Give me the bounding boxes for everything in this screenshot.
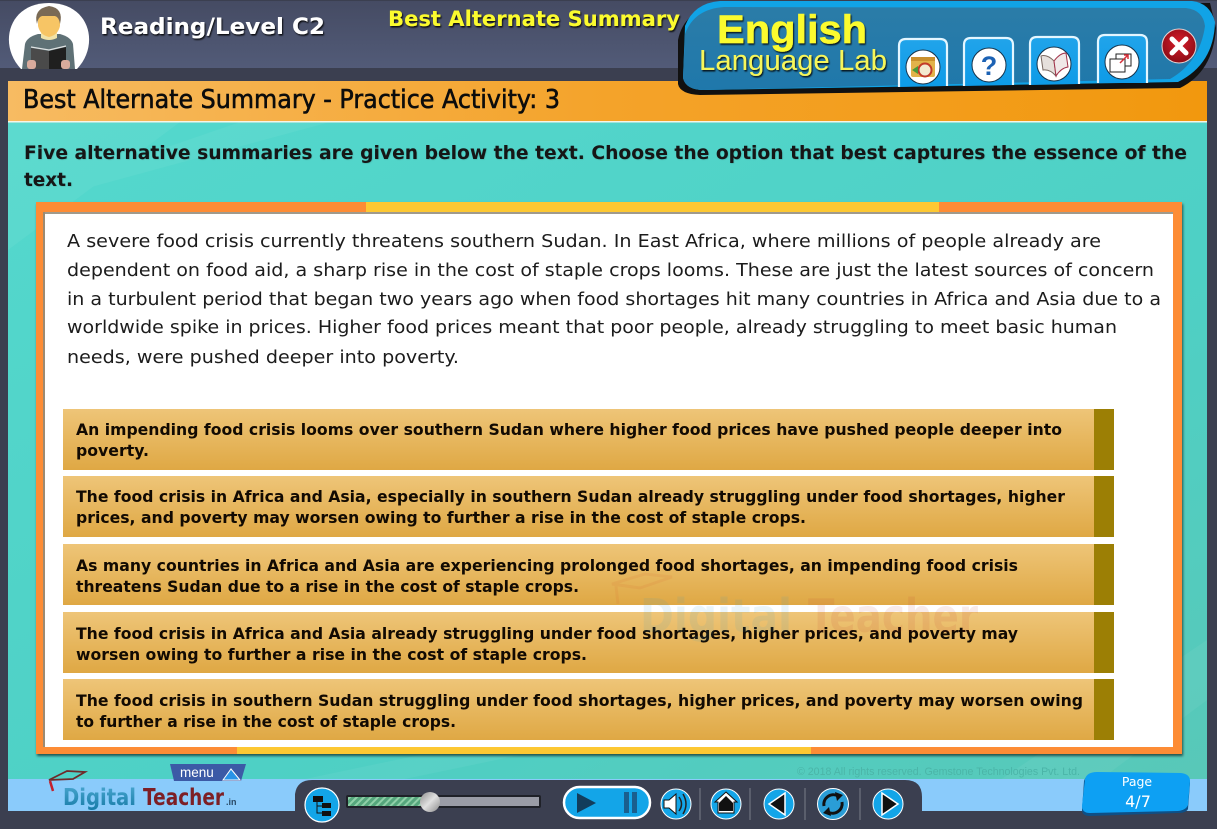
play and pause control xyxy=(564,787,650,818)
logo: Digital Teacher: Digital xyxy=(63,785,136,811)
option 5: to further a rise in the cost of staple crops. xyxy=(76,712,456,731)
passage text: worldwide spike in prices. Higher food prices meant that poor people, already struggling to meet basic human xyxy=(67,317,1117,338)
icon: home xyxy=(711,789,741,819)
option 5: The food crisis in southern Sudan struggling under food shortages, higher prices, and poverty may worsen owing xyxy=(76,691,1083,710)
panel: reading passage and options xyxy=(36,202,1182,754)
icon: book tab xyxy=(1030,37,1079,85)
icon: window tab xyxy=(1098,35,1147,83)
progress slider xyxy=(346,792,541,812)
icon: history folder tab xyxy=(899,39,947,87)
option 1 xyxy=(63,409,1114,470)
option 4 xyxy=(63,612,1114,673)
menu tab xyxy=(170,764,246,781)
passage text: needs, were pushed deeper into poverty. xyxy=(67,347,459,368)
page indicator: Page xyxy=(1122,774,1152,789)
passage text: dependent on food aid, a sharp rise in the cost of staple crops looms. These are just the latest sources of concern xyxy=(67,260,1154,281)
teal content panel xyxy=(8,122,1207,780)
watermark: Digital Teacher: Digital xyxy=(640,589,792,643)
logo: Digital Teacher xyxy=(49,771,236,811)
passage text xyxy=(67,231,1161,368)
instruction text: text. xyxy=(24,169,73,191)
icon: close button xyxy=(1162,29,1196,63)
option 3: threatens Sudan due to a rise in the cost of staple crops. xyxy=(76,577,579,596)
passage text: A severe food crisis currently threatens southern Sudan. In East Africa, where millions of people already are xyxy=(67,231,1101,252)
icon: replay xyxy=(818,788,848,820)
logo text: Language Lab: Language Lab xyxy=(699,45,887,77)
icon: volume xyxy=(661,789,691,819)
icon: help tab: ? xyxy=(981,51,997,81)
option 3: As many countries in Africa and Asia are experiencing prolonged food shortages, an impending food crisis xyxy=(76,556,1018,575)
option 5 xyxy=(63,679,1114,740)
icon: previous xyxy=(764,789,794,819)
logo text: English: English xyxy=(717,8,867,52)
heading: Practice Activity: Best Alternate Summary - Practice Activity: 3 xyxy=(23,85,560,115)
header bar xyxy=(0,1,1217,68)
instruction text xyxy=(24,142,1187,191)
icon: help tab xyxy=(964,38,1013,86)
option 2: The food crisis in Africa and Asia, especially in southern Sudan already struggling under food shortages, higher xyxy=(76,487,1065,506)
orange title bar xyxy=(8,81,1207,121)
option 2 xyxy=(63,476,1114,537)
control bar xyxy=(295,780,922,829)
copyright note: © 2018 All rights reserved. Gemstone Technologies Pvt. Ltd. xyxy=(797,766,1080,778)
page indicator xyxy=(1082,772,1190,816)
icon: next xyxy=(873,789,903,819)
heading: Reading/Level C2: Reading/Level C2 xyxy=(100,14,325,40)
option 4: worsen owing to further a rise in the cost of staple crops. xyxy=(76,645,587,664)
logo: Digital Teacher: Teacher xyxy=(143,785,225,811)
instruction text: Five alternative summaries are given below the text. Choose the option that best captures the essence of the xyxy=(24,142,1187,164)
English Language Lab panel xyxy=(678,1,1216,95)
option 1: An impending food crisis looms over southern Sudan where higher food prices have pushed people deeper into xyxy=(76,420,1062,439)
watermark: Digital Teacher xyxy=(612,574,978,643)
icon: reader avatar xyxy=(9,3,89,69)
option 2: prices, and poverty may worsen owing to further a rise in the cost of staple crops. xyxy=(76,508,806,527)
menu tab: menu xyxy=(180,765,214,780)
option 1: poverty. xyxy=(76,441,149,460)
logo: Digital Teacher: .in xyxy=(226,797,236,807)
icon: outline button xyxy=(305,788,339,822)
passage text: in a turbulent period that began two years ago when food shortages hit many countries in Africa and Asia due to a xyxy=(67,289,1161,310)
page indicator: 4/7 xyxy=(1125,792,1151,811)
option 3 xyxy=(63,544,1114,605)
heading: Best Alternate Summary: Best Alternate Summary xyxy=(388,7,680,31)
footer light blue strip xyxy=(8,779,1207,811)
watermark: Digital Teacher: Teacher xyxy=(808,589,978,643)
option 4: The food crisis in Africa and Asia already struggling under food shortages, higher prices, and poverty may xyxy=(76,624,1019,643)
